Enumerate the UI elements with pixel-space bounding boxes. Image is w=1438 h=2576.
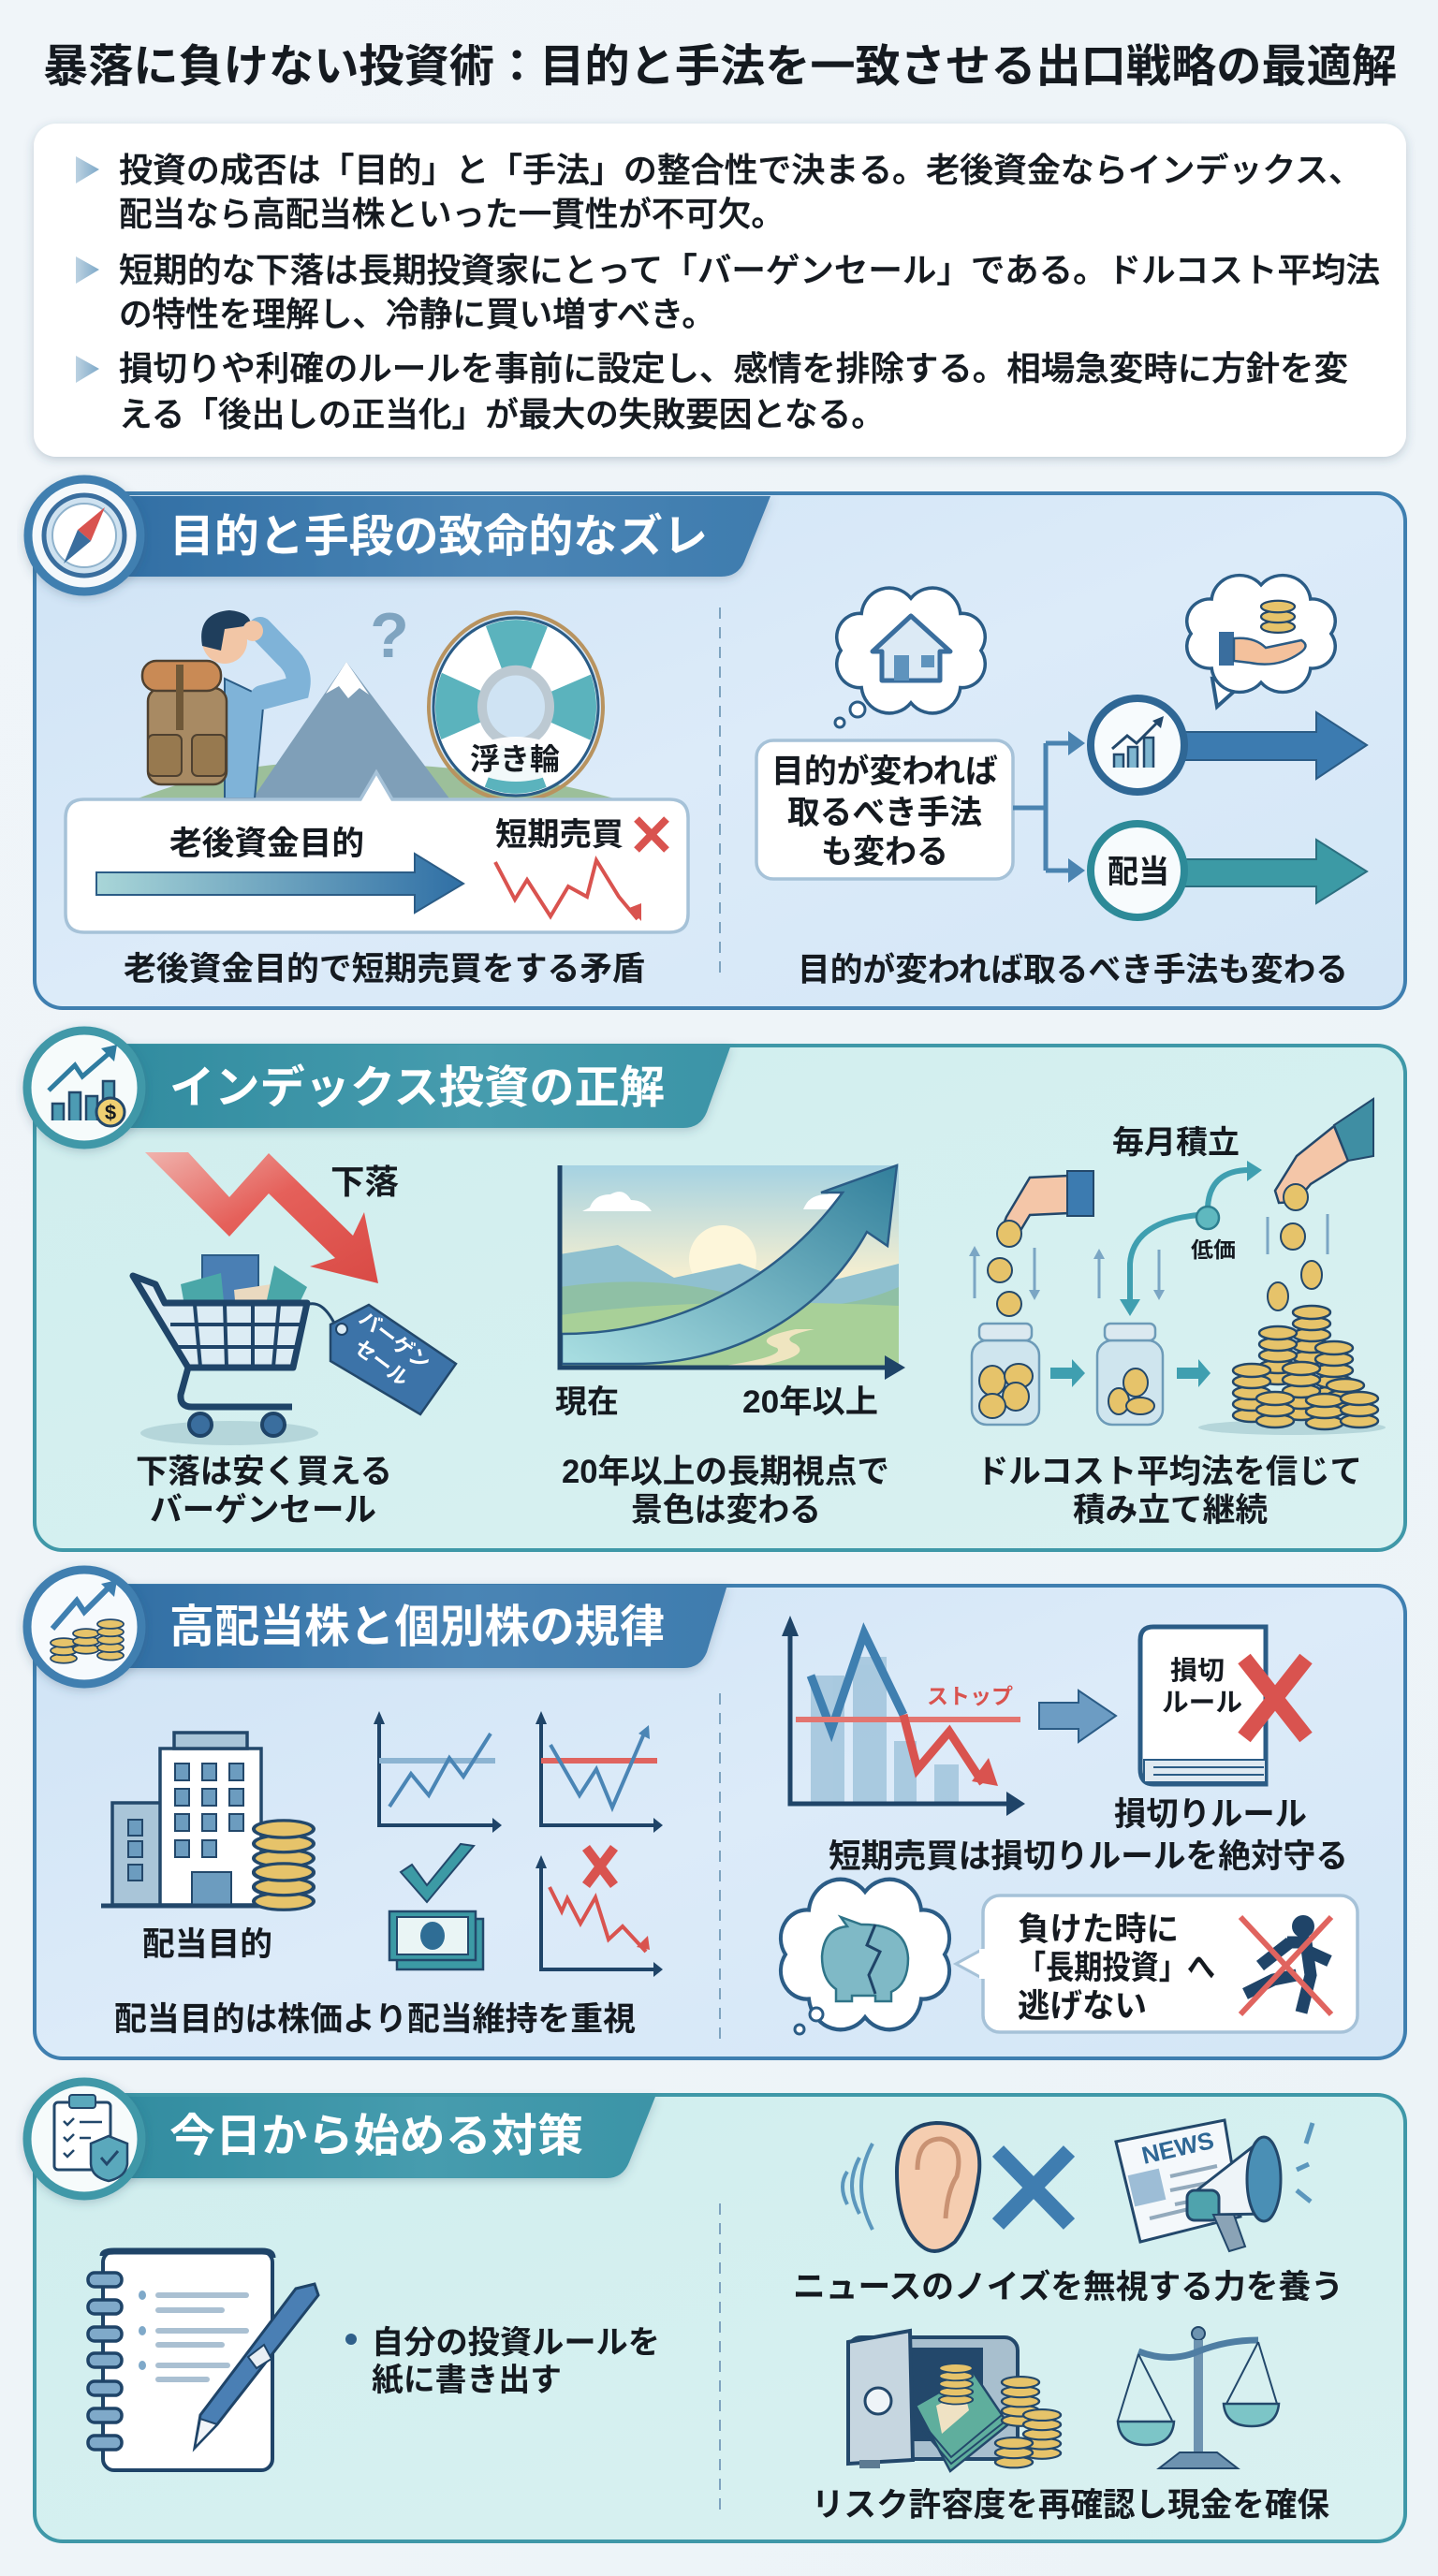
bullet 2: 短期的な下落は長期投資家にとって「バーゲンセール」である。ドルコスト平均法: [119, 251, 1380, 289]
icon: shopping cart with bargain tag: バーゲン: [355, 1307, 434, 1374]
chart: long-term landscape: 現在: [555, 1384, 619, 1420]
icon: hand and coin piles: [1198, 1099, 1386, 1435]
section heading ribbon: 高配当株と個別株の規律: [169, 1603, 665, 1652]
section heading ribbon: [84, 496, 770, 577]
panel: 今日から始める対策: [27, 2082, 1405, 2541]
text: write your rules: [345, 2325, 660, 2398]
bullet 2: [76, 251, 1380, 333]
icon: balance scale: [1118, 2327, 1279, 2468]
section heading ribbon: [84, 1045, 731, 1128]
icon: question mark: ?: [370, 600, 409, 671]
icon: runner crossed out: [1240, 1915, 1331, 2014]
icon: ear, cross and news megaphone: [843, 2120, 1313, 2251]
icon: ear, cross and news megaphone: NEWS: [1139, 2126, 1216, 2170]
caption: dollar cost: [976, 1454, 1362, 1529]
caption: re-check risk tolerance: リスク許容度を再確認し現金を確保: [812, 2487, 1329, 2524]
caption: bargain: バーゲンセール: [150, 1492, 376, 1529]
bullet 2: の特性を理解し、冷静に買い増すべき。: [119, 295, 715, 333]
caption: right: 目的が変われば取るべき手法も変わる: [798, 952, 1348, 988]
section heading ribbon: [84, 1585, 727, 1668]
icon: thought cloud with house: [835, 588, 985, 727]
bullet 1: [76, 151, 1362, 233]
callout: do not flee: 逃げない: [1018, 1988, 1147, 2025]
bullet 3: [76, 349, 1348, 433]
chart: mini recovery: [536, 1711, 663, 1833]
callout: do not flee: 「長期投資」へ: [1018, 1950, 1215, 1986]
chart: long-term landscape: [555, 1165, 905, 1420]
caption: long-term: [562, 1454, 889, 1529]
callout: purpose box: 取るべき手法: [787, 795, 982, 831]
caption: left: 老後資金目的で短期売買をする矛盾: [124, 951, 645, 988]
icon: shopping cart with bargain tag: セール: [350, 1335, 413, 1391]
bullet 1: 投資の成否は「目的」と「手法」の整合性で決まる。老後資金ならインデックス、: [119, 151, 1362, 189]
icon: rule book with cross: 損切: [1170, 1656, 1225, 1685]
caption: long-term: 20年以上の長期視点で: [562, 1454, 889, 1490]
caption: ignore news noise: ニュースのノイズを無視する力を養う: [793, 2268, 1343, 2305]
icon: chart and coins: [27, 1570, 141, 1684]
bullet 3: 損切りや利確のルールを事前に設定し、感情を排除する。相場急変時に方針を変: [119, 349, 1348, 388]
caption: dollar cost: ドルコスト平均法を信じて: [976, 1454, 1362, 1490]
callout: purpose box: [756, 740, 1013, 879]
label: 損切りルール: 損切りルール: [1114, 1796, 1307, 1833]
label: 配当目的: 配当目的: [142, 1926, 272, 1963]
text: write your rules: 紙に書き出す: [372, 2363, 562, 2398]
chart: mini rising: [374, 1711, 502, 1833]
callout: contradiction box: 短期売買: [495, 817, 624, 853]
icon: shopping cart with bargain tag: [133, 1255, 456, 1445]
icon: speech bubble with coin and hand: [1187, 576, 1335, 707]
callout: do not flee: 負けた時に: [1018, 1911, 1179, 1948]
bullet 3: える「後出しの正当化」が最大の失敗要因となる。: [119, 395, 885, 433]
icon: notebook and pen: [88, 2251, 318, 2470]
caption: bargain: 下落は安く買える: [136, 1454, 392, 1490]
arrow: dividend route: 配当: [1108, 855, 1169, 890]
icon: growth chart with dollar coin: $: [105, 1101, 116, 1124]
illustration: hiker, mountain and lifebuoy: [138, 610, 614, 798]
panel: 目的と手段の致命的なズレ: [28, 479, 1405, 1008]
icon: hand dropping coins into jar: [969, 1171, 1093, 1425]
icon: lifebuoy with label: [429, 613, 603, 800]
icon: compass: [28, 479, 140, 592]
section heading ribbon: [84, 2097, 655, 2178]
arrow: dividend route: [1091, 824, 1367, 917]
panel: 高配当株と個別株の規律: [27, 1570, 1405, 2058]
caption: dividend: 配当目的は株価より配当維持を重視: [114, 2001, 636, 2038]
callout: contradiction box: 老後資金目的: [169, 826, 364, 862]
icon: rule book with cross: [1140, 1627, 1306, 1784]
icon: office building and coins: [101, 1733, 314, 1910]
label: 下落: 下落: [330, 1163, 399, 1201]
icon: rule book with cross: ルール: [1162, 1688, 1242, 1717]
chart: stop loss: [782, 1616, 1025, 1816]
icon: low-price jar and curve: 毎月積立: [1112, 1125, 1240, 1161]
chart: stop loss: ストップ: [927, 1684, 1013, 1708]
caption: long-term: 景色は変わる: [631, 1492, 821, 1529]
callout: purpose box: も変わる: [821, 834, 948, 871]
section heading ribbon: 今日から始める対策: [169, 2112, 583, 2161]
caption: bargain: [136, 1454, 392, 1529]
arrow: to rule book: [1039, 1690, 1116, 1742]
title: 暴落に負けない投資術：目的と手法を一致させる出口戦略の最適解: [43, 42, 1397, 92]
icon: safe with cash and coins: [848, 2331, 1061, 2471]
chart: long-term landscape: 20年以上: [742, 1384, 878, 1420]
icon: check mark and banknote: [389, 1844, 483, 1969]
section heading ribbon: 目的と手段の致命的なズレ: [169, 512, 708, 562]
text: write your rules: 自分の投資ルールを: [372, 2325, 660, 2361]
icon: lifebuoy with label: 浮き輪: [470, 742, 560, 776]
panel: summary: [34, 124, 1406, 457]
icon: growth chart with dollar coin: [27, 1031, 141, 1145]
icon: low-price jar and curve: [1093, 1125, 1262, 1425]
chart: mini falling with red cross: [536, 1848, 663, 1977]
callout: contradiction box: [66, 772, 688, 932]
icon: broken piggy bank thought: [781, 1880, 949, 2034]
callout: purpose box: 目的が変われば: [771, 754, 998, 790]
bullet 1: 配当なら高配当株といった一貫性が不可欠。: [119, 195, 785, 233]
arrow: falling market: [145, 1152, 378, 1283]
arrow: index route: [1091, 698, 1367, 792]
caption: stop loss: 短期売買は損切りルールを絶対守る: [829, 1838, 1348, 1875]
icon: low-price jar and curve: 低価: [1191, 1237, 1236, 1262]
section heading ribbon: インデックス投資の正解: [169, 1063, 665, 1113]
arrow: branch connector: [1013, 731, 1085, 883]
callout: do not flee: [956, 1895, 1357, 2032]
caption: dollar cost: 積み立て継続: [1073, 1492, 1268, 1529]
icon: clipboard with shield: [27, 2082, 141, 2196]
panel: インデックス投資の正解: [27, 1031, 1405, 1550]
